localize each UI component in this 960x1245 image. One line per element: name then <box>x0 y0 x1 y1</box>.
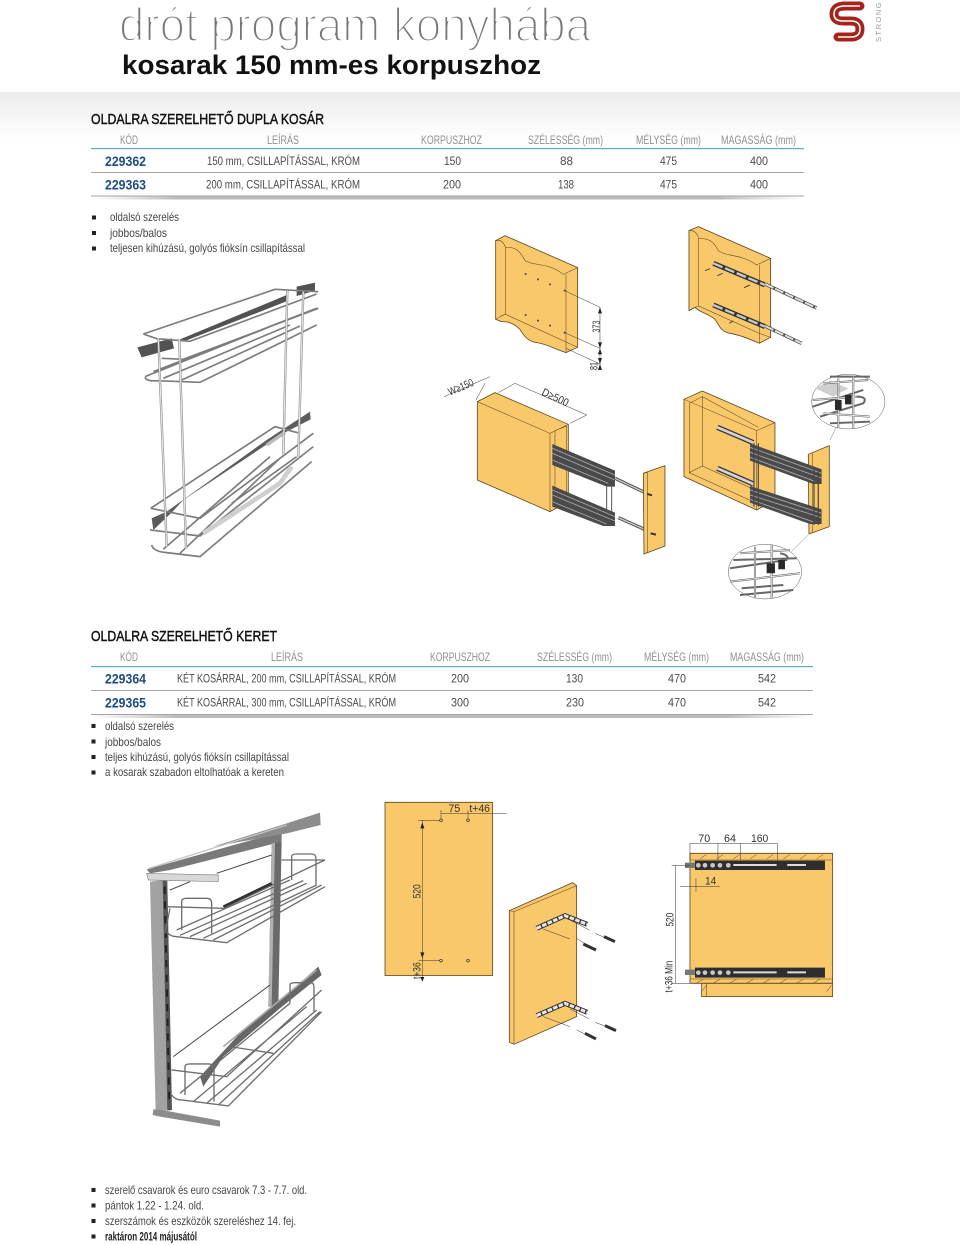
row 229364: 542 <box>758 672 776 686</box>
bullet list: references: szerelő csavarok és euro csavarok 7.3 - 7.7. old. <box>105 1183 307 1197</box>
table: oldalra szerelhető keret <box>91 649 813 718</box>
subtitle: kosarak 150 mm-es korpuszhoz <box>122 50 541 80</box>
row 229362: 229362 <box>105 153 146 169</box>
row 229362 <box>105 153 768 169</box>
table header row 2: KORPUSZHOZ <box>430 650 490 664</box>
row 229363: 229363 <box>105 176 146 192</box>
table header row 1: SZÉLESSÉG (mm) <box>528 132 603 147</box>
table header row 1: KÓD <box>120 132 138 147</box>
diagram: side panel with drill holes: 81 <box>589 362 601 370</box>
bullet list: references: szerszámok és eszközök szereléshez 14. fej. <box>105 1214 296 1228</box>
diagram: drilling template panel: t+46 <box>469 803 490 815</box>
row 229365: 230 <box>566 696 584 710</box>
row 229364: 130 <box>566 672 583 686</box>
grey header band <box>0 92 960 140</box>
diagram: cabinet section with rails: 14 <box>705 876 716 888</box>
bullet list: references: pántok 1.22 - 1.24. old. <box>105 1198 204 1212</box>
logo: STRONG: STRONG <box>874 1 883 42</box>
diagram: drilling template panel: 75 <box>448 803 460 815</box>
bullet list 2: a kosarak szabadon eltolhatóak a kereten <box>105 765 284 779</box>
table header row 1: MÉLYSÉG (mm) <box>636 132 701 147</box>
diagram: cabinet section with rails: 160 <box>751 833 768 845</box>
row 229364 <box>105 670 776 686</box>
row 229362: 150 mm, CSILLAPÍTÁSSAL, KRÓM <box>207 153 360 168</box>
row 229363: 475 <box>660 178 677 192</box>
bullet list: references <box>92 1183 307 1244</box>
row 229364: 229364 <box>105 670 146 686</box>
diagram: side panel with drill holes: 373 <box>591 321 603 333</box>
bullet list 2: oldalsó szerelés <box>105 719 174 733</box>
diagram: cabinet section with rails: 64 <box>724 833 736 845</box>
row 229364: KÉT KOSÁRRAL, 200 mm, CSILLAPÍTÁSSAL, KRÓM <box>177 670 396 686</box>
table header row 1: KORPUSZHOZ <box>421 133 482 147</box>
bullet list 1: jobbos/balos <box>109 226 167 240</box>
row 229365: 542 <box>758 696 776 710</box>
diagram: side panel with drill holes <box>496 236 603 370</box>
diagram: cabinet with pulled-out basket: W≥150 <box>446 377 476 398</box>
table header row 2: LEÍRÁS <box>271 649 303 664</box>
logo: STRONG <box>834 1 883 42</box>
table header row 2 <box>120 649 804 664</box>
bullet list 2: teljes kihúzású, golyós fióksín csillapítással <box>105 750 289 764</box>
bullet list: references: raktáron 2014 májusától <box>105 1230 197 1244</box>
diagram: mounted basket with detail circles <box>684 374 885 599</box>
table header row 2: SZÉLESSÉG (mm) <box>537 649 612 664</box>
diagram: cabinet section with rails: 520 <box>665 913 677 927</box>
row 229362: 88 <box>560 154 573 168</box>
section heading 2: OLDALRA SZERELHETŐ KERET <box>91 628 277 645</box>
row 229363 <box>105 176 768 192</box>
diagram: side panel with rails <box>689 227 817 343</box>
row 229364: 470 <box>668 672 686 686</box>
bullet list 1: teljesen kihúzású, golyós fióksín csillapítással <box>110 241 305 255</box>
row 229362: 400 <box>750 154 768 168</box>
row 229365: 300 <box>451 696 469 710</box>
diagram: cabinet section with rails <box>663 833 833 997</box>
row 229365: 470 <box>668 696 686 710</box>
photo: frame with two baskets <box>147 813 325 1127</box>
diagram: cabinet with pulled-out basket: D≥500 <box>540 386 570 409</box>
photo: double wire basket <box>137 283 318 557</box>
diagram: drilling template panel <box>385 802 507 982</box>
diagram: cabinet with pulled-out basket <box>444 377 665 554</box>
row 229363: 400 <box>750 178 768 192</box>
diagram: drilling template panel: 520 <box>411 884 423 898</box>
row 229364: 200 <box>451 672 469 686</box>
diagram: cabinet section with rails: t+36 Min <box>663 961 675 992</box>
row 229363: 138 <box>558 178 574 192</box>
table header row 1: LEÍRÁS <box>267 132 299 147</box>
bullet list 1 <box>92 210 305 255</box>
table header row 2: MAGASSÁG (mm) <box>730 649 804 664</box>
row 229363: 200 <box>443 178 461 192</box>
bullet list 2 <box>92 719 289 779</box>
row 229362: 475 <box>660 154 677 168</box>
row 229365 <box>105 694 776 710</box>
row 229362: 150 <box>444 154 461 168</box>
diagram: drilling template panel: t+36 <box>411 962 423 979</box>
diagram: door panel with brackets <box>509 883 616 1044</box>
bullet list 1: oldalsó szerelés <box>110 210 179 224</box>
bullet list 2: jobbos/balos <box>104 735 161 749</box>
row 229365: 229365 <box>105 694 146 710</box>
table header row 1 <box>120 132 796 147</box>
row 229365: KÉT KOSÁRRAL, 300 mm, CSILLAPÍTÁSSAL, KRÓM <box>177 694 396 710</box>
row 229363: 200 mm, CSILLAPÍTÁSSAL, KRÓM <box>206 176 360 192</box>
table: oldalra szerelhető dupla kosár <box>91 111 804 200</box>
table header row 2: MÉLYSÉG (mm) <box>644 649 709 664</box>
table header row 2: KÓD <box>120 649 138 664</box>
table header row 1: MAGASSÁG (mm) <box>721 132 796 147</box>
section heading 1: OLDALRA SZERELHETŐ DUPLA KOSÁR <box>91 111 324 128</box>
diagram: cabinet section with rails: 70 <box>698 833 710 845</box>
